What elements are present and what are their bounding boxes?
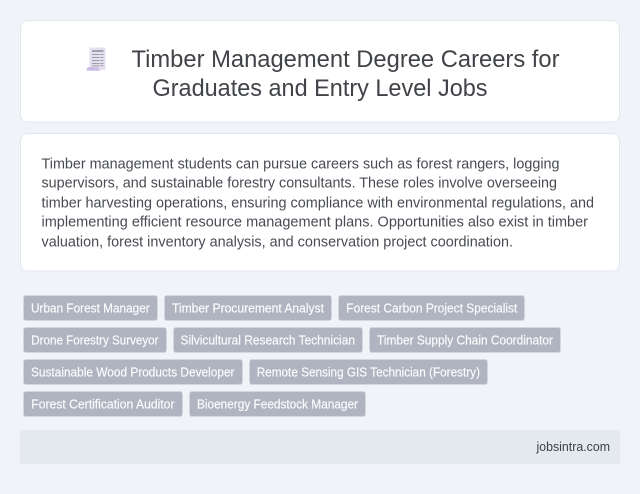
tag: Timber Supply Chain Coordinator <box>370 328 560 352</box>
tag: Bioenergy Feedstock Manager <box>190 392 366 416</box>
heading: Timber Management Degree Careers for <box>132 46 560 73</box>
tag: Sustainable Wood Products Developer: Sustainable Wood Products Developer <box>31 365 234 379</box>
tag: Silvicultural Research Technician: Silvicultural Research Technician <box>180 333 355 347</box>
heading: Graduates and Entry Level Jobs <box>152 75 488 102</box>
tag: Urban Forest Manager: Urban Forest Manager <box>31 301 150 315</box>
panel: career tags <box>24 296 560 416</box>
footer <box>20 430 620 464</box>
text block: description: valuation, forest inventory analysis, and conservation project coordination. <box>42 234 513 250</box>
text block: description: implementing efficient resource management plans. Opportunities also exist in timber <box>42 214 588 230</box>
panel: title card <box>20 20 620 122</box>
heading <box>132 46 560 102</box>
tag: Urban Forest Manager <box>24 296 158 320</box>
icon: document scroll <box>86 48 106 71</box>
tag: Remote Sensing GIS Technician (Forestry): Remote Sensing GIS Technician (Forestry) <box>257 365 480 379</box>
tag: Forest Certification Auditor: Forest Certification Auditor <box>31 397 174 411</box>
footer source text: jobsintra.com <box>536 440 610 454</box>
text block: description <box>42 156 594 250</box>
panel: description card <box>20 134 620 271</box>
tag: Sustainable Wood Products Developer <box>24 360 242 384</box>
tag: Silvicultural Research Technician <box>174 328 362 352</box>
tag: Timber Procurement Analyst: Timber Procurement Analyst <box>172 301 325 315</box>
tag: Drone Forestry Surveyor <box>24 328 166 352</box>
text block: description: supervisors, and sustainable forestry consultants. These roles involve overseeing <box>42 176 557 192</box>
tag: Forest Carbon Project Specialist <box>338 296 524 320</box>
tag: Remote Sensing GIS Technician (Forestry) <box>250 360 488 384</box>
tag: Forest Carbon Project Specialist: Forest Carbon Project Specialist <box>346 301 518 315</box>
tag: Drone Forestry Surveyor: Drone Forestry Surveyor <box>31 333 158 347</box>
tag: Forest Certification Auditor <box>24 392 182 416</box>
text block: description: timber harvesting operations, ensuring compliance with environmental regulations, and <box>42 195 594 211</box>
tag: Timber Supply Chain Coordinator: Timber Supply Chain Coordinator <box>377 333 553 347</box>
tag: Timber Procurement Analyst <box>164 296 332 320</box>
text block: description: Timber management students can pursue careers such as forest rangers, logging <box>42 156 560 172</box>
tag: Bioenergy Feedstock Manager: Bioenergy Feedstock Manager <box>197 397 358 411</box>
